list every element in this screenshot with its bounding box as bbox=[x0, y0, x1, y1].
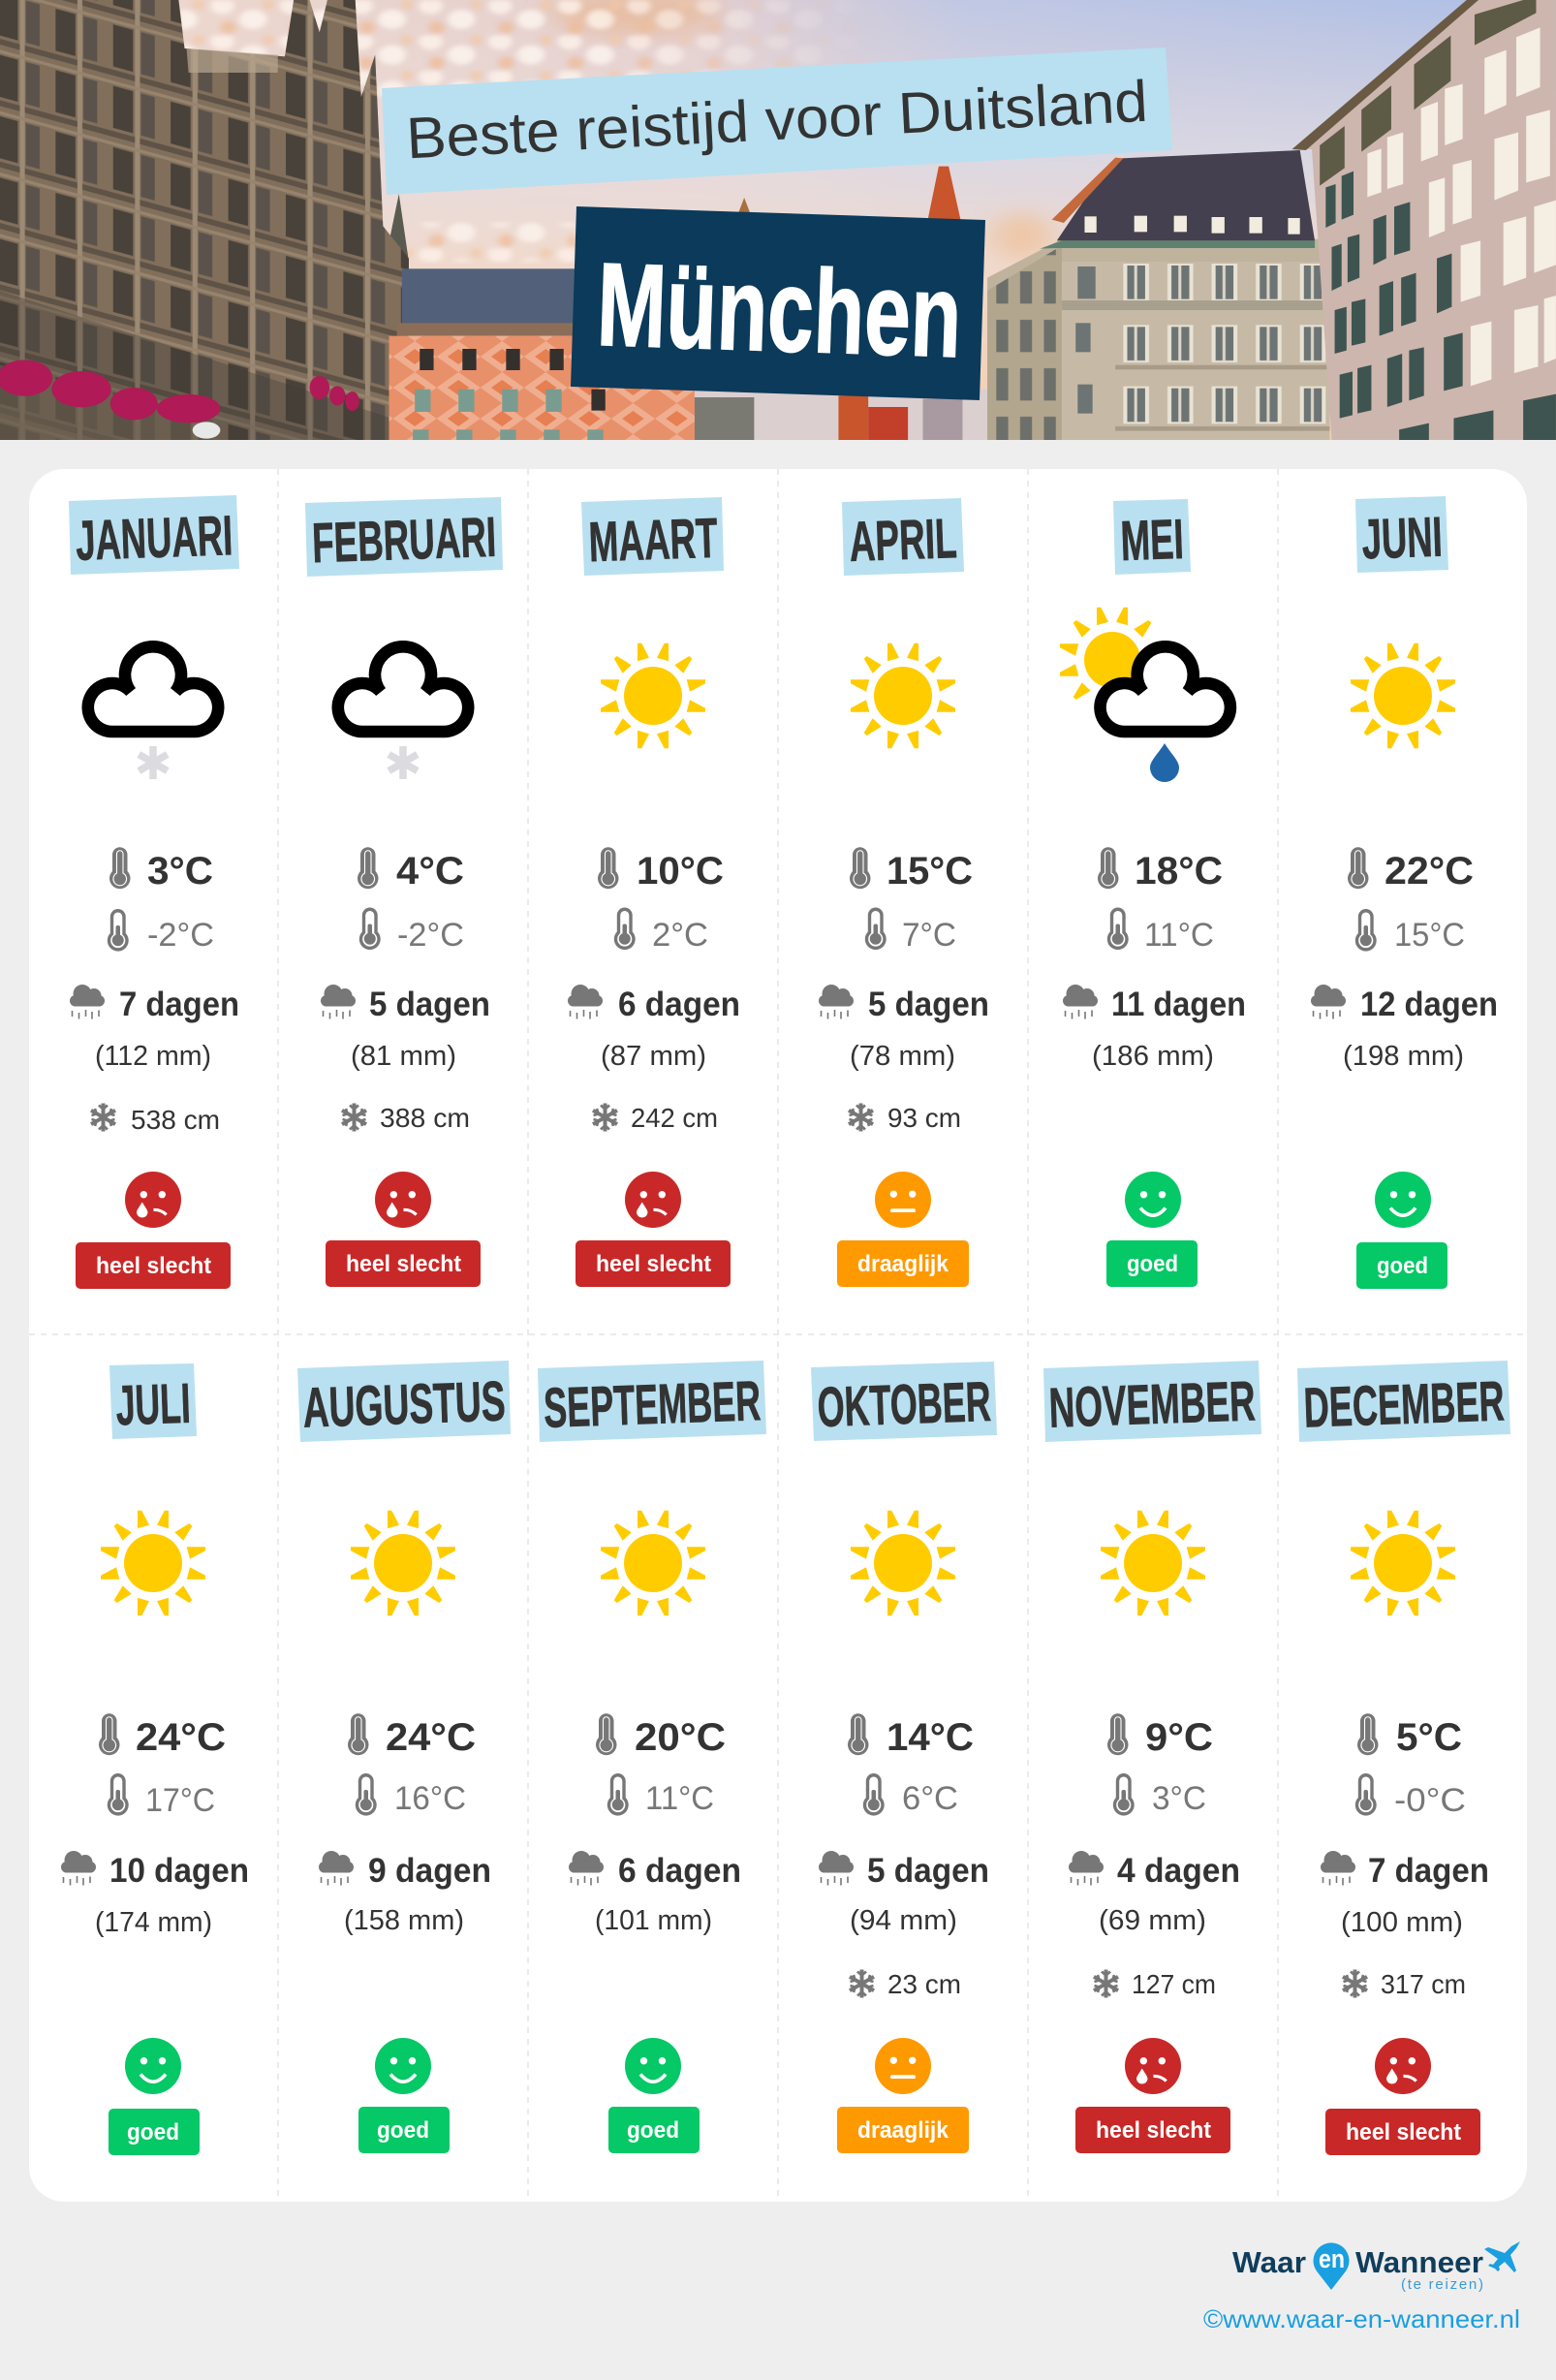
min temperature: 16°C bbox=[394, 1780, 466, 1817]
header photo: München street scene bbox=[0, 0, 1556, 440]
rain: 5 dagen bbox=[868, 986, 989, 1023]
website credit: ©www.waar-en-wanneer.nl bbox=[1203, 2304, 1520, 2333]
max temperature bbox=[358, 847, 464, 892]
panel: oktober bbox=[811, 1362, 997, 2153]
min temperature bbox=[360, 909, 464, 954]
max temperature: 10°C bbox=[637, 850, 724, 892]
max temperature bbox=[1098, 847, 1223, 892]
rating: heel slecht bbox=[346, 1251, 461, 1277]
rain bbox=[1069, 1851, 1240, 1936]
min temperature: 3°C bbox=[1152, 1780, 1206, 1817]
rating: goed bbox=[1377, 1253, 1428, 1279]
snow bbox=[1094, 1969, 1216, 1999]
rain: 4 dagen bbox=[1117, 1852, 1240, 1890]
rain: 10 dagen bbox=[109, 1852, 249, 1890]
snow bbox=[342, 1103, 470, 1133]
rating bbox=[1075, 2038, 1230, 2153]
max temperature: 24°C bbox=[386, 1716, 476, 1759]
min temperature bbox=[1108, 909, 1214, 954]
max temperature bbox=[598, 847, 724, 892]
panel: september bbox=[538, 1361, 766, 2153]
logo: Waar en Wanneer: (te reizen) bbox=[1401, 2276, 1483, 2293]
snow bbox=[593, 1103, 718, 1133]
panel: maart bbox=[568, 497, 740, 1287]
rating bbox=[576, 1172, 731, 1287]
max temperature: 18°C bbox=[1135, 850, 1223, 892]
logo: Waar en Wanneer: en bbox=[1319, 2244, 1345, 2273]
heading: juni bbox=[1355, 496, 1448, 573]
rain: (158 mm) bbox=[344, 1905, 464, 1936]
snow: 23 cm bbox=[887, 1969, 961, 1999]
snow bbox=[1343, 1969, 1466, 1999]
max temperature: 4°C bbox=[396, 850, 464, 892]
min temperature: 11°C bbox=[1144, 917, 1214, 954]
min temperature bbox=[1356, 911, 1465, 954]
heading: februari bbox=[305, 497, 503, 577]
logo: Waar en Wanneer: Waar bbox=[1232, 2245, 1306, 2279]
rating bbox=[1356, 1172, 1447, 1289]
panel: augustus bbox=[297, 1361, 511, 2153]
heading: maart bbox=[581, 497, 724, 576]
rating: heel slecht bbox=[96, 1253, 211, 1279]
icon: sun bbox=[851, 643, 955, 748]
icon: sun bbox=[601, 643, 705, 748]
logo: Waar en Wanneer bbox=[1232, 2241, 1520, 2293]
min temperature bbox=[1356, 1775, 1466, 1819]
heading: februari: FEBRUARI bbox=[311, 506, 497, 575]
icon: cloud with snow bbox=[338, 646, 468, 779]
max temperature bbox=[99, 1713, 226, 1759]
rain: (81 mm) bbox=[351, 1041, 456, 1072]
rating: goed bbox=[627, 2117, 679, 2144]
rating: draaglijk bbox=[857, 1251, 949, 1277]
max temperature: 15°C bbox=[887, 850, 973, 892]
heading: augustus: AUGUSTUS bbox=[302, 1369, 507, 1440]
min temperature bbox=[616, 909, 708, 954]
heading: januari bbox=[69, 495, 239, 575]
panel: januari bbox=[69, 495, 239, 1289]
rating bbox=[837, 2038, 969, 2153]
heading: oktober: OKTOBER bbox=[817, 1370, 992, 1439]
rain: (94 mm) bbox=[850, 1905, 957, 1936]
heading: april bbox=[842, 498, 964, 576]
min temperature: 7°C bbox=[902, 917, 956, 954]
max temperature bbox=[348, 1713, 476, 1759]
title banner: Beste reistijd voor Duitsland bbox=[405, 69, 1149, 171]
heading: november bbox=[1043, 1361, 1261, 1442]
panel: december bbox=[1297, 1361, 1510, 2155]
city banner: München bbox=[595, 238, 964, 382]
rating: goed bbox=[127, 2119, 179, 2145]
heading: oktober bbox=[811, 1362, 997, 1441]
rain bbox=[70, 985, 239, 1072]
panel: april bbox=[819, 498, 989, 1287]
rain bbox=[1321, 1851, 1489, 1938]
rating bbox=[837, 1172, 969, 1287]
min temperature bbox=[109, 911, 214, 954]
title banner bbox=[382, 47, 1172, 195]
rain bbox=[819, 1851, 989, 1936]
rating: goed bbox=[1127, 1251, 1178, 1277]
snow: 127 cm bbox=[1132, 1969, 1216, 1999]
snow: 242 cm bbox=[631, 1103, 718, 1133]
max temperature bbox=[1348, 847, 1474, 892]
icon: sun bbox=[851, 1511, 955, 1615]
max temperature bbox=[1107, 1713, 1213, 1759]
icon: sun bbox=[1351, 1511, 1455, 1615]
icon: cloud with snow bbox=[88, 646, 218, 779]
max temperature: 24°C bbox=[136, 1716, 226, 1759]
rain bbox=[568, 985, 740, 1072]
max temperature bbox=[848, 1713, 974, 1759]
max temperature: 14°C bbox=[887, 1716, 974, 1759]
rating bbox=[1325, 2038, 1480, 2155]
icon: sun bbox=[101, 1511, 205, 1615]
city banner bbox=[571, 206, 985, 400]
rain: 9 dagen bbox=[368, 1852, 491, 1890]
rain: 5 dagen bbox=[369, 986, 490, 1023]
rain: 11 dagen bbox=[1111, 986, 1246, 1023]
snow bbox=[91, 1103, 220, 1135]
rain bbox=[1063, 985, 1246, 1072]
heading: juni: JUNI bbox=[1361, 506, 1444, 571]
max temperature bbox=[1357, 1713, 1462, 1759]
rating bbox=[109, 2038, 200, 2155]
min temperature: 2°C bbox=[652, 917, 708, 954]
rain bbox=[321, 985, 490, 1072]
panel: juli bbox=[61, 1363, 249, 2155]
max temperature: 3°C bbox=[147, 850, 213, 892]
heading: maart: MAART bbox=[588, 507, 719, 574]
snow: 538 cm bbox=[131, 1105, 220, 1135]
heading: november: NOVEMBER bbox=[1048, 1369, 1257, 1440]
rain: (101 mm) bbox=[595, 1905, 712, 1936]
rain: (186 mm) bbox=[1092, 1041, 1214, 1072]
rain: 6 dagen bbox=[618, 986, 740, 1023]
rating: heel slecht bbox=[1096, 2117, 1211, 2144]
rain: 7 dagen bbox=[119, 986, 239, 1023]
min temperature: -0°C bbox=[1394, 1782, 1466, 1819]
rain: 12 dagen bbox=[1360, 986, 1498, 1023]
icon: sun bbox=[601, 1511, 705, 1615]
icon: sun bbox=[1101, 1511, 1205, 1615]
heading: juli: JULI bbox=[115, 1372, 192, 1437]
rain: 7 dagen bbox=[1368, 1852, 1489, 1890]
rain bbox=[569, 1851, 741, 1936]
panel: month card bbox=[29, 469, 1527, 2202]
min temperature bbox=[864, 1775, 958, 1817]
min temperature bbox=[357, 1775, 466, 1817]
min temperature: 11°C bbox=[645, 1780, 714, 1817]
icon: sun bbox=[351, 1511, 455, 1615]
min temperature: 17°C bbox=[145, 1782, 215, 1819]
min temperature bbox=[1114, 1775, 1206, 1817]
min temperature: -2°C bbox=[147, 917, 214, 954]
panel: november bbox=[1043, 1361, 1261, 2153]
rating bbox=[76, 1172, 231, 1289]
max temperature bbox=[109, 847, 213, 892]
min temperature bbox=[608, 1775, 714, 1817]
max temperature: 20°C bbox=[635, 1716, 726, 1759]
rating bbox=[608, 2038, 700, 2153]
max temperature bbox=[850, 847, 973, 892]
rain: (87 mm) bbox=[601, 1041, 706, 1072]
rating: heel slecht bbox=[1346, 2119, 1461, 2145]
panel: juni bbox=[1311, 496, 1498, 1289]
rain bbox=[61, 1851, 249, 1938]
max temperature bbox=[596, 1713, 726, 1759]
min temperature bbox=[109, 1775, 215, 1819]
max temperature: 5°C bbox=[1396, 1716, 1462, 1759]
max temperature: 22°C bbox=[1385, 850, 1474, 892]
min temperature: -2°C bbox=[397, 917, 464, 954]
snow: 317 cm bbox=[1381, 1969, 1466, 1999]
heading: augustus bbox=[297, 1361, 511, 1442]
snow bbox=[849, 1103, 961, 1133]
rating: heel slecht bbox=[596, 1251, 711, 1277]
rain: (112 mm) bbox=[95, 1041, 211, 1072]
rain: (100 mm) bbox=[1341, 1907, 1463, 1938]
rating bbox=[1106, 1172, 1198, 1287]
rating: draaglijk bbox=[857, 2117, 949, 2144]
panel: februari bbox=[305, 497, 503, 1287]
heading: april: APRIL bbox=[849, 507, 958, 574]
min temperature bbox=[866, 909, 956, 954]
panel: mei bbox=[1060, 499, 1246, 1287]
icon: sun, cloud and rain drop bbox=[1060, 608, 1230, 782]
snow: 93 cm bbox=[887, 1103, 961, 1133]
rain: 5 dagen bbox=[867, 1852, 989, 1890]
min temperature: 6°C bbox=[902, 1780, 958, 1817]
heading: mei: MEI bbox=[1120, 508, 1185, 573]
heading: september bbox=[538, 1361, 766, 1442]
snow: 388 cm bbox=[380, 1103, 470, 1133]
heading: mei bbox=[1113, 499, 1191, 575]
rating bbox=[326, 1172, 481, 1287]
rating: goed bbox=[377, 2117, 429, 2144]
heading: september: SEPTEMBER bbox=[543, 1369, 762, 1440]
snow bbox=[850, 1969, 961, 1999]
rain bbox=[319, 1851, 491, 1936]
heading: juli bbox=[109, 1363, 197, 1439]
rain bbox=[819, 985, 989, 1072]
logo: Waar en Wanneer: Wanneer bbox=[1355, 2245, 1483, 2279]
rain: 6 dagen bbox=[618, 1852, 741, 1890]
rain: (69 mm) bbox=[1099, 1905, 1206, 1936]
rain bbox=[1311, 985, 1498, 1072]
heading: januari: JANUARI bbox=[75, 504, 233, 573]
max temperature: 9°C bbox=[1145, 1716, 1213, 1759]
rain: (198 mm) bbox=[1343, 1041, 1464, 1072]
icon: sun bbox=[1351, 643, 1455, 748]
rain: (78 mm) bbox=[850, 1041, 955, 1072]
rating bbox=[358, 2038, 450, 2153]
rain: (174 mm) bbox=[95, 1907, 212, 1938]
min temperature: 15°C bbox=[1394, 917, 1465, 954]
